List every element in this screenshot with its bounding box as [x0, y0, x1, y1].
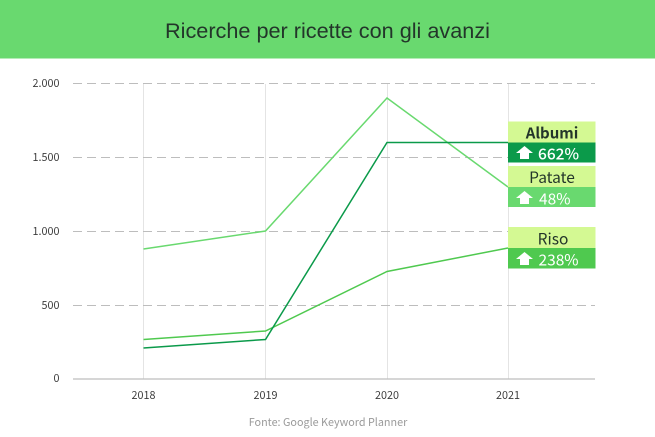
x axis labels: [132, 387, 520, 403]
label: Albumi: 662%: [538, 142, 579, 164]
x axis labels: 2018: [132, 387, 155, 403]
x axis labels: 2020: [375, 387, 399, 403]
line: Albumi: [144, 142, 508, 348]
y axis labels: 1.000: [33, 223, 60, 239]
title: Ricerche per ricette con gli avanzi: [165, 20, 490, 43]
label: Albumi: Albumi: [525, 122, 578, 144]
y axis labels: 1.500: [33, 149, 60, 165]
icon: up arrow: [516, 252, 533, 265]
x axis labels: 2021: [496, 387, 520, 403]
header band: [0, 0, 655, 58]
x axis: [73, 378, 595, 380]
x axis labels: 2019: [254, 387, 277, 403]
label: Patate: [508, 166, 596, 210]
line chart: [33, 75, 595, 403]
source note: Fonte: Google Keyword Planner: [249, 414, 408, 430]
y axis labels: 500: [42, 297, 60, 313]
y axis labels: 2.000: [33, 75, 60, 91]
y axis labels: 0: [54, 370, 60, 386]
line: Riso: [144, 248, 508, 340]
line: Patate: [144, 98, 508, 249]
icon: up arrow: [516, 191, 533, 204]
label: Riso: 238%: [538, 248, 579, 270]
label: Riso: [508, 227, 596, 270]
label: Patate: 48%: [539, 188, 570, 210]
label: Albumi: [508, 122, 596, 164]
icon: up arrow: [516, 146, 533, 159]
label: Patate: Patate: [529, 166, 575, 188]
label: Riso: Riso: [538, 228, 568, 250]
y axis labels: [33, 75, 60, 386]
